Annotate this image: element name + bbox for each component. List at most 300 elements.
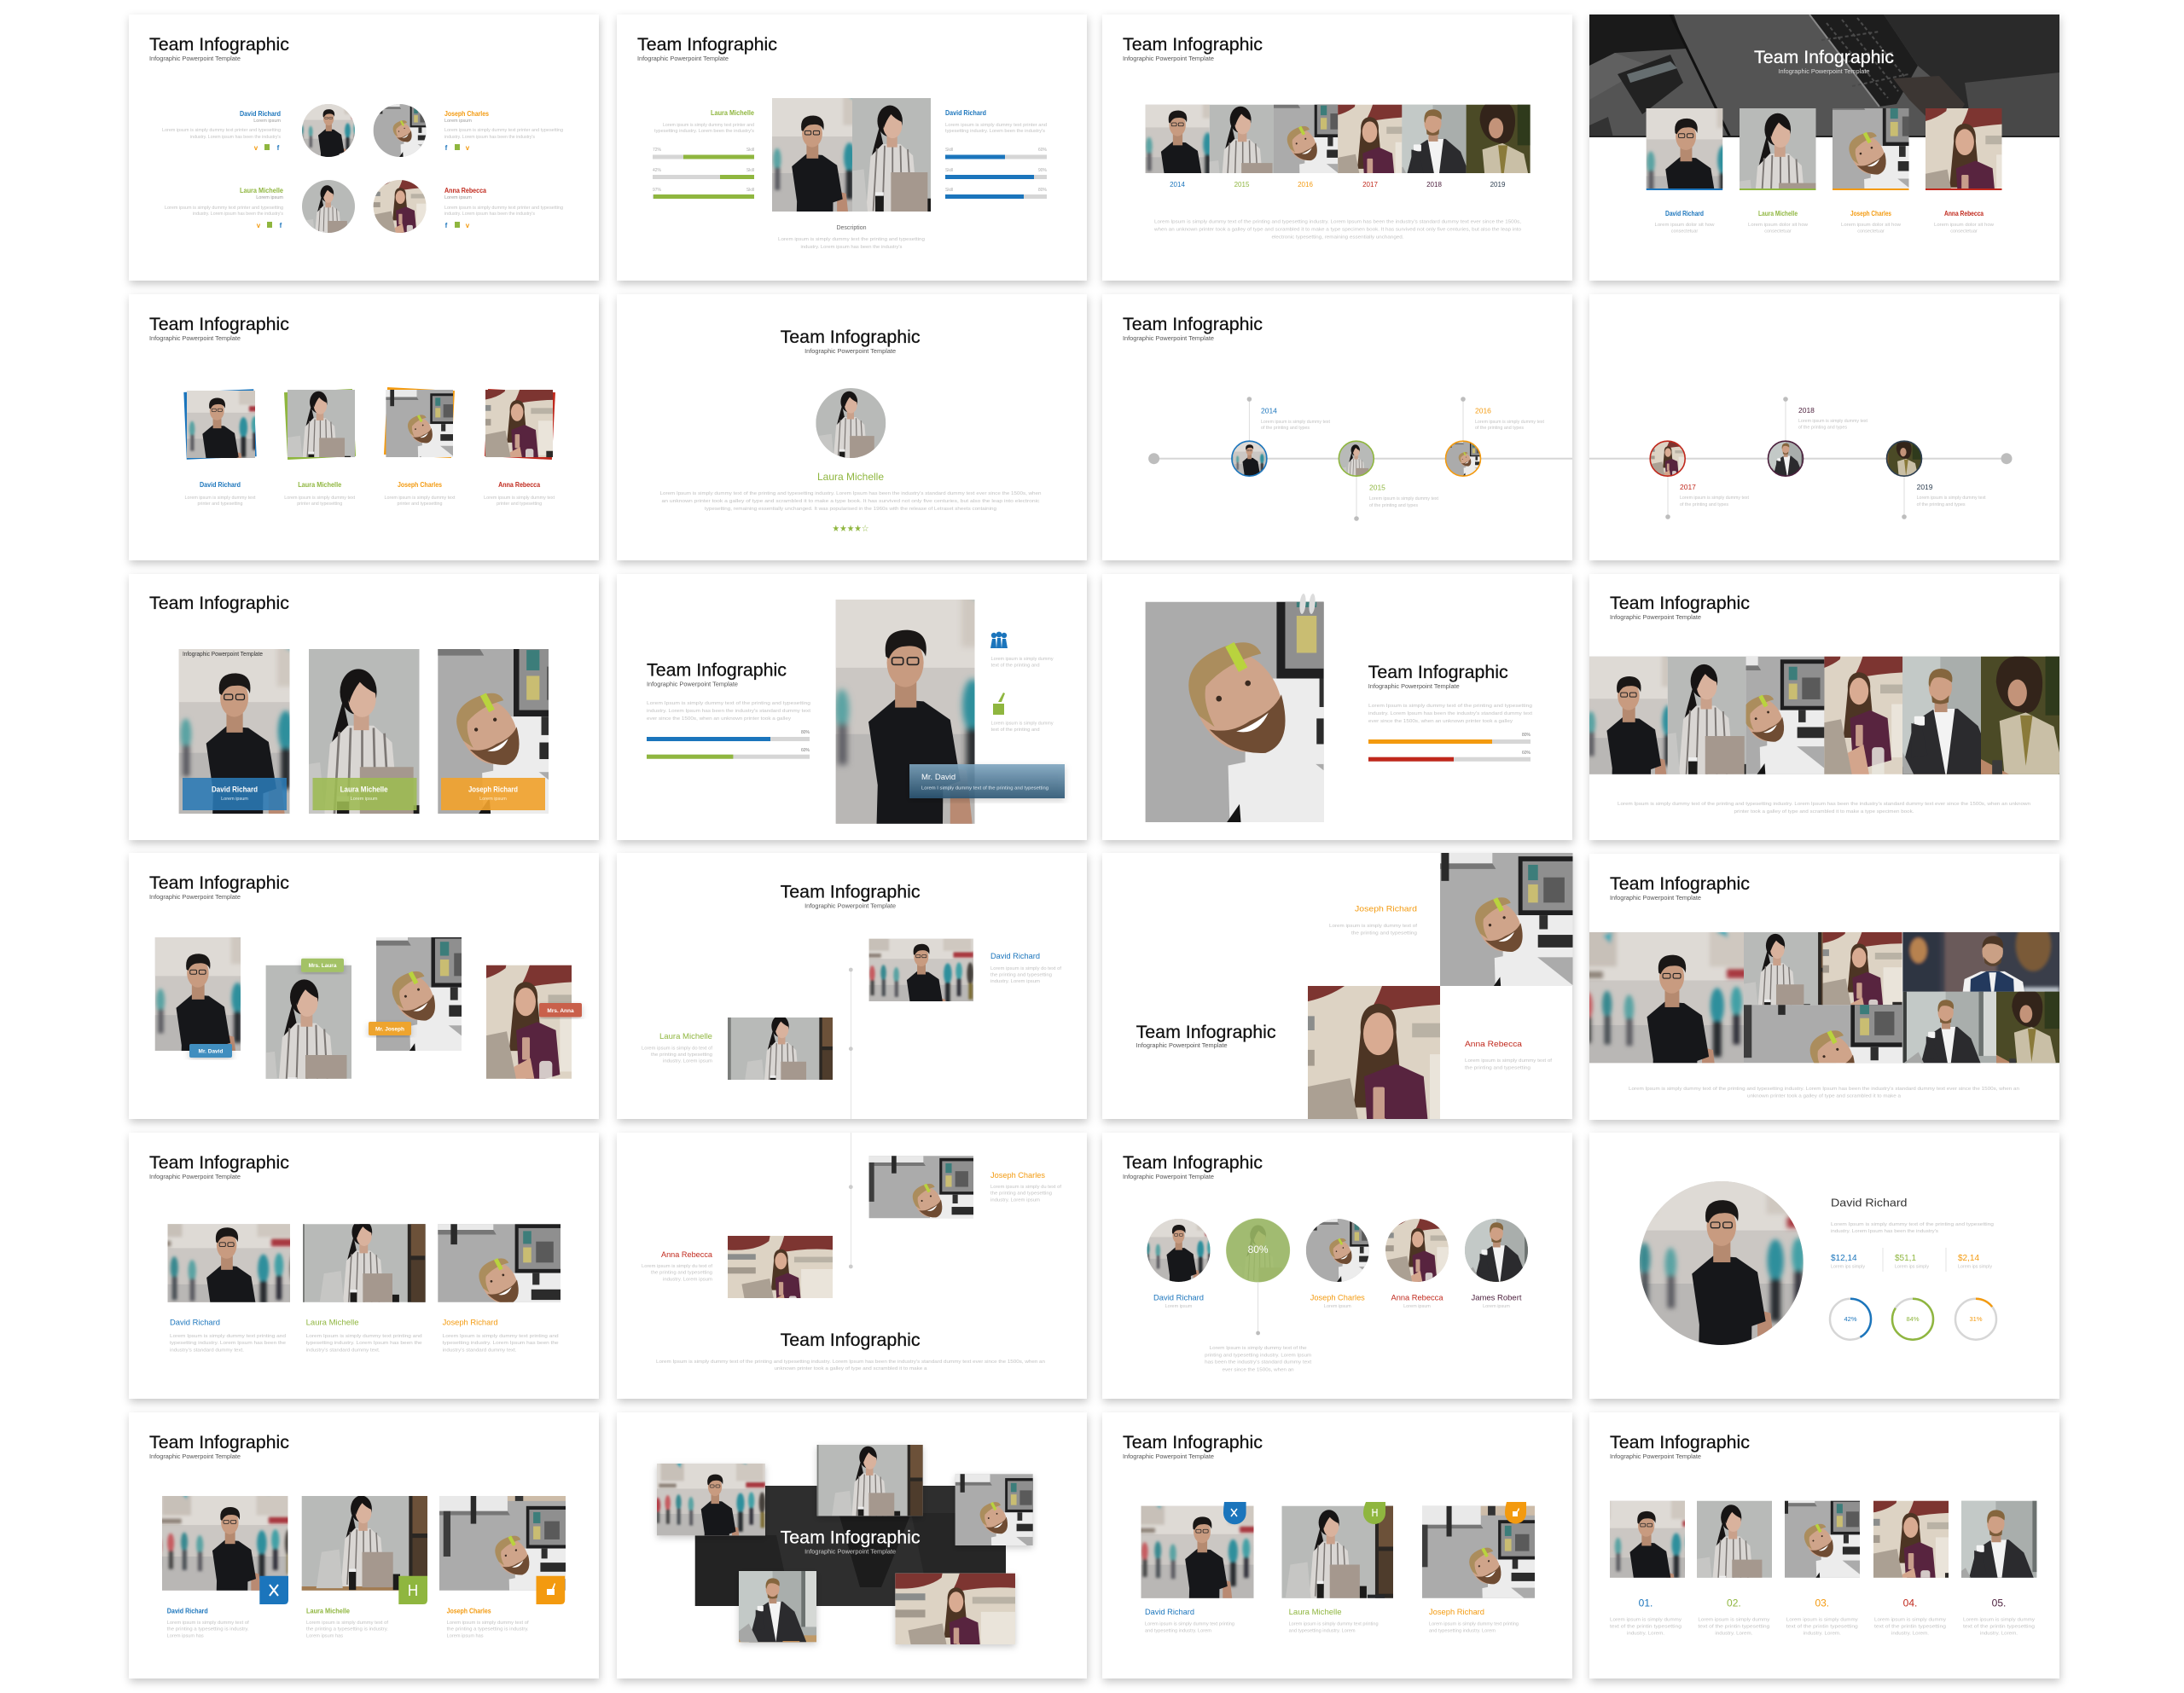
panel: dark header with four portraits — [1573, 14, 2067, 289]
portrait — [836, 600, 974, 824]
text: Anna: industry. Lorem ipsum — [663, 1278, 712, 1283]
stats row: $51,1 — [1895, 1254, 1916, 1263]
body text: Lorem Ipsum is simply dummy text of the — [1210, 1346, 1307, 1351]
names and captions: Laura Michelle — [298, 481, 342, 489]
body text: Lorem Ipsum is simply dummy text of the printing and typesetting industry. Lorem Ipsum has been the industry's standard dummy text ever since the 1500s, when an unknown — [1618, 802, 2030, 807]
portrait — [816, 388, 886, 458]
panel: Mr. David profile — [617, 550, 1089, 938]
names and captions: Laura Michelle — [1758, 210, 1798, 217]
column 04: industry. Lorem. — [1891, 1632, 1930, 1637]
names and captions: Lorem ipsum dolor sit how — [1841, 223, 1901, 228]
node 2019 — [1885, 440, 1923, 477]
text: David — [990, 952, 1061, 984]
column 05: industry. Lorem. — [1980, 1632, 2018, 1637]
person card: David Richard: David Richard — [212, 786, 258, 794]
text: Joseph: the printing and typesetting — [990, 1191, 1052, 1197]
connector — [1256, 1282, 1260, 1335]
profile: Joseph: the printing a typesetting is industry. — [447, 1627, 529, 1632]
subtitle: Infographic Powerpoint Template — [1368, 682, 1460, 690]
bio: Joseph Charles: Lorem ipsum is simply dummy text printer and typesetting — [444, 128, 563, 133]
label 2017: 2017 — [1680, 483, 1696, 491]
profile: David: Lorem ipsum is simply dummy text printing — [1145, 1622, 1234, 1627]
names: Lorem ipsum — [1165, 1304, 1193, 1309]
names and captions: Anna Rebecca — [1944, 210, 1984, 217]
panel: scattered collage on dark image — [617, 1412, 1087, 1693]
title: Team Infographic — [1610, 874, 1750, 894]
title: Team Infographic — [1136, 1023, 1276, 1042]
portrait: Joseph — [1263, 1189, 1389, 1315]
portrait: Joseph Charles — [374, 104, 427, 157]
profile: Laura: industry's standard dummy text. — [306, 1348, 380, 1354]
portrait: James — [1437, 1197, 1563, 1324]
bars: green skills: Skill — [746, 148, 754, 153]
star rating: ★★★★☆ — [833, 524, 868, 534]
bars: green skills: 42% — [653, 168, 662, 173]
bio: Anna Rebecca: Lorem ipsum — [444, 195, 472, 200]
bio: David Richard: Lorem ipsum — [253, 119, 281, 124]
text: team — [991, 657, 1054, 669]
body text: unknown printer took a galley of type and scrambled it to make a — [775, 1366, 928, 1371]
node 2014 — [1231, 440, 1268, 477]
profile: David: David Richard — [167, 1608, 208, 1615]
year labels: 2018 — [1426, 181, 1442, 188]
stats row: Lorem ips simply — [1831, 1265, 1865, 1270]
panel: yearly photo strip — [1086, 14, 1577, 281]
bio: David Richard: David Richard — [240, 110, 281, 118]
year labels: 2015 — [1234, 181, 1250, 188]
panel: skill bars with two portraits — [617, 14, 1087, 286]
panel: timeline part two — [1589, 294, 2059, 560]
stats row: $12,14 — [1831, 1254, 1857, 1263]
name: David Richard — [1831, 1197, 1908, 1209]
portrait: Laura highlighted: 80% — [1248, 1244, 1269, 1255]
photo: Anna — [728, 1236, 833, 1298]
mosaic photos — [1534, 873, 2097, 1183]
overlay caption: Mr. David — [921, 773, 956, 782]
bio: Joseph Charles: f — [445, 144, 448, 152]
column 05 — [1918, 1477, 2082, 1641]
body text — [1629, 1087, 2019, 1099]
text: plant — [991, 722, 1054, 733]
label 2019 — [1917, 483, 1986, 507]
panel: five round portraits — [1102, 1133, 1572, 1399]
body text — [1831, 1222, 1994, 1234]
subtitle: Infographic Powerpoint Template — [1123, 1452, 1214, 1460]
subtitle: Infographic Powerpoint Template — [804, 347, 896, 355]
title: Team Infographic — [149, 594, 289, 613]
text: plant: text of the printing and — [991, 728, 1040, 733]
portrait with tag: Mr. Joseph — [265, 877, 506, 1118]
title: Team Infographic — [1123, 315, 1263, 334]
subtitle: Infographic Powerpoint Template — [149, 334, 241, 342]
description — [778, 225, 925, 250]
text: Laura: Laura Michelle — [659, 1032, 712, 1041]
text: Anna — [642, 1250, 713, 1283]
subtitle: Infographic Powerpoint Template — [1610, 1452, 1701, 1460]
photo strip — [1086, 61, 1577, 249]
profile: David — [1108, 1480, 1287, 1659]
panel: photo mosaic — [1534, 854, 2097, 1183]
bars: green skills: Skill — [746, 188, 754, 193]
bio: Laura Michelle: Lorem ipsum is simply dummy text printer and typesetting — [165, 206, 283, 211]
bio: Anna Rebecca: Anna Rebecca — [444, 187, 486, 194]
names and captions: Lorem ipsum dolor sit how — [1748, 223, 1808, 228]
label 2016: 2016 — [1475, 406, 1491, 415]
bio: Joseph Charles: Lorem ipsum — [444, 119, 472, 124]
column 01: Lorem ipsum is simply dummy — [1610, 1617, 1682, 1622]
names: Lorem ipsum — [1483, 1304, 1510, 1309]
names and captions: Lorem ipsum is simply dummy text — [184, 496, 256, 501]
node 2015 — [1338, 440, 1375, 477]
ring chart 42%: 42% — [1844, 1315, 1857, 1323]
panel: photos with icon boxes — [129, 1412, 599, 1679]
label 2015: 2015 — [1369, 484, 1385, 492]
stats row: Lorem ips simply — [1895, 1265, 1929, 1270]
portrait with tag: Mr. David: Mr. David — [199, 1049, 223, 1054]
body text: ever since the 1500s, when an unknown printer took a galley — [1368, 719, 1513, 724]
person card: Joseph Richard — [271, 555, 623, 907]
body text — [656, 1360, 1045, 1371]
portrait with tag: Mr. David — [78, 907, 306, 1135]
year labels: 2019 — [1490, 181, 1506, 188]
bars: green skills: 97% — [653, 188, 662, 193]
names and captions: Joseph Charles — [1850, 210, 1891, 217]
person card: Laura Michelle: Lorem ipsum — [351, 797, 378, 802]
profile: Joseph: typesetting industry. Lorem Ipsum has been the — [443, 1341, 559, 1346]
description: Description — [836, 225, 867, 231]
names and captions: Lorem ipsum dolor sit how — [1655, 223, 1715, 228]
ring chart 31%: 31% — [1969, 1315, 1983, 1323]
text: Joseph: industry. Lorem ipsum — [990, 1198, 1040, 1203]
names and captions: printer and typesetting — [198, 502, 242, 507]
portrait: David — [1147, 1219, 1210, 1282]
photo: Joseph — [868, 1156, 973, 1218]
profile: Joseph: industry's standard dummy text. — [443, 1348, 517, 1354]
bio: David Richard — [162, 110, 281, 152]
label 2019: of the printing and types — [1917, 502, 1966, 507]
subtitle: Infographic Powerpoint Template — [1123, 334, 1214, 342]
title: Team Infographic — [1610, 594, 1750, 613]
progress bars: 80% — [1522, 733, 1531, 738]
body text: has been the industry's standard dummy text — [1205, 1360, 1312, 1365]
body text: Lorem Ipsum is simply dummy text of the printing and typesetting industry. Lorem Ipsum has been the industry's standard dummy text ever since the 1500s, when an — [656, 1360, 1045, 1365]
title: Team Infographic — [781, 328, 921, 347]
year labels: 2017 — [1362, 181, 1378, 188]
names and captions: consectetuar — [1950, 229, 1978, 235]
bars: blue skills: 90% — [1038, 168, 1048, 173]
bio: Laura Michelle: industry. Lorem ipsum has been the industry's — [193, 212, 283, 217]
progress bars: 60% — [801, 748, 810, 753]
progress bars — [647, 730, 810, 759]
column 03: Lorem ipsum is simply dummy — [1786, 1617, 1858, 1622]
label 2018 — [1798, 406, 1867, 430]
column 05: text of the printin typesetting — [1963, 1625, 2035, 1630]
bio: Anna Rebecca — [444, 187, 563, 229]
bio: Anna Rebecca: v — [466, 222, 470, 229]
ring chart 84%: 84% — [1906, 1315, 1920, 1323]
column 05: Lorem ipsum is simply dummy — [1963, 1617, 2035, 1622]
body text: when an unknown printer took a galley of type and scrambled it to make a type specimen book. It has survived not only five centuries, but also the leap into — [1153, 228, 1521, 233]
text: Joseph: the printing and typesetting — [1351, 931, 1417, 936]
portrait column: David — [1573, 74, 1787, 289]
bio: David Richard: v — [254, 144, 258, 152]
label 2014: Lorem ipsum is simply dummy text — [1261, 420, 1330, 425]
profile: David: typesetting industry. Lorem Ipsum has been the — [170, 1341, 286, 1346]
text: Anna: the printing and typesetting — [651, 1271, 712, 1276]
body text: typesetting, remaining essentially unchanged. It was popularised in the 1960s with the release of Letraset sheets containing — [705, 507, 996, 512]
subtitle: Infographic Powerpoint Template — [1123, 1173, 1214, 1180]
column 04: Lorem ipsum is simply dummy — [1874, 1617, 1946, 1622]
profile: Laura: Laura Michelle — [306, 1608, 351, 1615]
portrait: Anna — [1354, 1192, 1480, 1319]
profile: Laura — [282, 1180, 442, 1354]
text: Laura: the printing and typesetting — [651, 1052, 712, 1058]
subtitle: Infographic Powerpoint Template — [149, 893, 241, 901]
bio: Joseph Charles: industry. Lorem ipsum has been the industry's — [444, 135, 535, 140]
body text: printing and typesetting industry. Lorem Ipsum — [1205, 1353, 1312, 1358]
tilted portrait: David — [136, 367, 289, 519]
portrait column: Anna — [1860, 65, 2067, 272]
title: Team Infographic — [1368, 663, 1508, 682]
title: Team Infographic — [149, 873, 289, 893]
profile: David: Lorem Ipsum is simply dummy text printing and — [170, 1334, 286, 1339]
bars: green skills: 72% — [653, 148, 662, 153]
profile: Laura: Laura Michelle — [306, 1319, 359, 1328]
name: Laura Michelle — [817, 471, 884, 483]
text: David: industry. Lorem ipsum — [990, 979, 1040, 984]
person card: Joseph Richard: Joseph Richard — [468, 786, 518, 794]
person card: Laura Michelle: Laura Michelle — [340, 786, 388, 794]
body text: industry. Lorem Ipsum has been the industry's standard dummy text — [647, 709, 811, 714]
portrait: Laura Michelle — [302, 180, 355, 233]
text: David: Lorem ipsum is simply do text of — [990, 966, 1061, 971]
body text — [647, 701, 811, 722]
profile: Joseph: Lorem ipsum is simply dummy text printing — [1429, 1622, 1519, 1627]
collage photo: David — [637, 1444, 785, 1592]
text: Joseph: Joseph Charles — [990, 1171, 1045, 1180]
portrait with tag: Mrs. Anna: Mrs. Anna — [547, 1008, 574, 1014]
column 01: industry. Lorem. — [1627, 1632, 1665, 1637]
subtitle: Infographic Powerpoint Template — [1778, 67, 1870, 75]
names and captions: Lorem ipsum is simply dummy text — [484, 496, 555, 501]
subtitle: Infographic Powerpoint Template — [1136, 1041, 1228, 1049]
names — [1153, 1293, 1522, 1309]
progress bars: 80% — [801, 730, 810, 735]
names and captions: Lorem ipsum is simply dummy text — [284, 496, 356, 501]
panel: photos with round badges — [1102, 1412, 1572, 1679]
node 2017 — [1649, 440, 1686, 477]
text: Joseph: Lorem ipsum is simply du text of — [990, 1185, 1061, 1190]
title: Team Infographic — [149, 315, 289, 334]
title: Team Infographic — [781, 1528, 921, 1548]
profile: Joseph: Lorem ipsum has — [447, 1633, 484, 1638]
profile: Laura — [1247, 1470, 1410, 1634]
progress bars: 60% — [1522, 751, 1531, 756]
profile: David: Lorem ipsum has — [167, 1633, 204, 1638]
body text — [1153, 220, 1522, 241]
bars: blue skills: 60% — [1038, 148, 1048, 153]
body text: printer took a galley of type and scrambled it to make a type specimen book. — [1734, 809, 1914, 815]
dark header image — [1589, 14, 2059, 137]
label 2017: of the printing and types — [1680, 502, 1728, 507]
title: Team Infographic — [1123, 35, 1263, 55]
text: Anna: Anna Rebecca — [1465, 1040, 1523, 1049]
bars: blue skills: Skill — [945, 188, 953, 193]
profile: David — [115, 1184, 327, 1395]
progress bars — [1368, 733, 1531, 762]
collage photo: Anna — [874, 1541, 1037, 1693]
body text: Lorem Ipsum is simply dummy text of the printing and typesetting — [1831, 1222, 1994, 1227]
portrait column: Joseph — [1740, 51, 1947, 258]
title: Team Infographic — [1123, 1433, 1263, 1452]
label 2017: Lorem ipsum is simply dummy text — [1680, 496, 1749, 501]
subtitle: Infographic Powerpoint Template — [637, 55, 729, 62]
portrait column: Laura — [1674, 62, 1881, 270]
profile: David: the printing a typesetting is industry. — [167, 1627, 249, 1632]
column 02: industry. Lorem. — [1715, 1632, 1753, 1637]
bio: Anna Rebecca: f — [445, 222, 448, 229]
panel: Joseph and Anna mosaic — [1102, 793, 1601, 1245]
ring chart 42% — [1830, 1299, 1871, 1340]
names: Anna Rebecca — [1391, 1293, 1443, 1302]
names and captions: printer and typesetting — [398, 502, 442, 507]
label 2014 — [1261, 406, 1330, 431]
panel: David Richard stats — [1558, 1133, 2059, 1447]
subtitle: Infographic Powerpoint Template — [647, 681, 738, 688]
body text: unknown printer took a galley of type and scrambled it to make a — [1747, 1093, 1902, 1099]
label 2018: of the printing and types — [1798, 425, 1847, 430]
label 2018: Lorem ipsum is simply dummy text — [1798, 419, 1867, 424]
collage photo: James — [712, 1552, 840, 1681]
body text: electronic typesetting, remaining essentially unchanged. — [1271, 235, 1404, 241]
title: Team Infographic — [149, 35, 289, 55]
column 02: text of the printin typesetting — [1698, 1625, 1769, 1630]
column 04: 04. — [1903, 1597, 1917, 1609]
title: Team Infographic — [149, 1153, 289, 1173]
portrait with tag: Mr. Joseph: Mr. Joseph — [375, 1027, 404, 1032]
panel: five numbered portraits — [1555, 1412, 2082, 1679]
text: Joseph — [1329, 905, 1418, 936]
label 2014: 2014 — [1261, 406, 1277, 415]
names and captions: Lorem ipsum dolor sit how — [1934, 223, 1994, 228]
icon: team — [990, 632, 1008, 648]
names: David Richard — [1153, 1293, 1204, 1302]
text: Anna: Anna Rebecca — [661, 1250, 713, 1260]
person card: David Richard — [78, 612, 375, 909]
bio: Joseph Charles — [444, 110, 563, 152]
text: Laura Michelle: Lorem ipsum is simply dummy text printer and — [663, 123, 754, 128]
profile: Joseph — [394, 1461, 586, 1653]
column 02: 02. — [1727, 1597, 1741, 1609]
profile: David — [133, 1470, 317, 1653]
column 01: 01. — [1639, 1597, 1653, 1609]
body text: industry. Lorem Ipsum has been the industry's standard dummy text — [1368, 711, 1533, 716]
title: Team Infographic — [149, 1433, 289, 1452]
bio: Laura Michelle: f — [280, 222, 282, 229]
subtitle: Infographic Powerpoint Template — [1610, 894, 1701, 902]
bio: Laura Michelle: Laura Michelle — [240, 187, 284, 194]
body text — [1205, 1346, 1312, 1372]
portrait: Laura highlighted — [1195, 1194, 1321, 1320]
panel: circular team portraits — [129, 14, 599, 281]
label 2018: 2018 — [1798, 406, 1815, 415]
person card: David Richard: Lorem ipsum — [221, 797, 248, 802]
column 05: 05. — [1992, 1597, 2006, 1609]
names: Lorem ipsum — [1324, 1304, 1351, 1309]
label 2015: of the printing and types — [1369, 503, 1418, 508]
profile: Laura: typesetting industry. Lorem Ipsum has been the — [306, 1341, 422, 1346]
stats row — [1831, 1248, 1992, 1272]
body text: Lorem Ipsum is simply dummy text of the printing and typesetting — [647, 701, 810, 706]
year labels — [1170, 181, 1506, 188]
names and captions: Anna Rebecca — [498, 481, 541, 489]
ring chart 84% — [1892, 1299, 1933, 1340]
column 03: industry. Lorem. — [1804, 1632, 1841, 1637]
column 04 — [1828, 1466, 1991, 1637]
profile: Laura: Laura Michelle — [1289, 1608, 1342, 1617]
names: Joseph Charles — [1310, 1293, 1365, 1302]
text: David Richard: Lorem ipsum is simply dummy text printer and — [945, 123, 1047, 128]
column 01: text of the printin typesetting — [1610, 1625, 1682, 1630]
column 02: Lorem ipsum is simply dummy — [1698, 1617, 1770, 1622]
body text: industry. Lorem Ipsum has been the industry's — [1831, 1229, 1938, 1234]
subtitle: Infographic Powerpoint Template — [804, 1548, 896, 1556]
label 2014: of the printing and types — [1261, 426, 1310, 431]
names and captions: consectetuar — [1764, 229, 1792, 235]
names and captions: printer and typesetting — [497, 502, 542, 507]
text: Laura Michelle — [654, 109, 755, 134]
text: Anna: Lorem ipsum is simply du text of — [642, 1264, 712, 1269]
text: David Richard: David Richard — [945, 109, 986, 117]
person card: Joseph Richard: Lorem ipsum — [479, 797, 507, 802]
text: Joseph — [990, 1171, 1061, 1203]
panel: single profile — [617, 294, 1087, 560]
subtitle: Infographic Powerpoint Template — [1610, 613, 1701, 621]
panel: three landscape profiles — [115, 1133, 599, 1399]
icon: quote marks — [1298, 594, 1316, 614]
tilted portrait: Anna — [447, 361, 585, 499]
subtitle: Infographic Powerpoint Template — [1123, 55, 1214, 62]
photo: Anna — [1308, 986, 1440, 1119]
body text — [660, 491, 1041, 512]
text: David Richard — [945, 109, 1047, 134]
description: industry. Lorem ipsum has been the industry's — [800, 245, 903, 250]
names and captions: David Richard — [1665, 210, 1704, 217]
body text: Lorem Ipsum is simply dummy text of the printing and typesetting industry. Lorem Ipsum has been the industry's standard dummy text ever since the 1500s, — [1154, 220, 1522, 225]
body text: ever since the 1500s, when an unknown printer took a galley — [647, 716, 791, 722]
text: Anna: Lorem ipsum is simply dummy text of — [1465, 1058, 1553, 1064]
body text: Lorem Ipsum is simply dummy text of the printing and typesetting industry. Lorem Ipsum has been the industry's standard dummy text ever since the 1500s, when an — [1629, 1087, 2019, 1092]
collage photo: Joseph — [898, 1441, 1054, 1597]
column 03: 03. — [1815, 1597, 1829, 1609]
bio: David Richard: industry. Lorem ipsum has been the industry's — [190, 135, 281, 140]
title: Team Infographic — [1754, 48, 1894, 67]
label 2016: of the printing and types — [1475, 426, 1524, 431]
large portrait — [1558, 1136, 1869, 1447]
names and captions: printer and typesetting — [297, 502, 342, 507]
profile: David: David Richard — [1145, 1608, 1194, 1617]
body text: Lorem Ipsum is simply dummy text of the printing and typesetting — [1368, 704, 1532, 709]
photo: Laura — [728, 1018, 833, 1080]
bars: blue skills: 80% — [1038, 188, 1048, 193]
text: plant: Lorem ipsum is simply dummy — [991, 722, 1054, 727]
profile: David: and typesetting industry. Lorem — [1145, 1629, 1211, 1634]
text: team: text of the printing and — [991, 664, 1040, 669]
profile: Laura: Lorem Ipsum is simply dummy text printing and — [306, 1334, 422, 1339]
photo: Joseph — [1440, 853, 1573, 986]
tilted portrait: Laura — [249, 357, 387, 496]
photo: David — [868, 938, 973, 1001]
